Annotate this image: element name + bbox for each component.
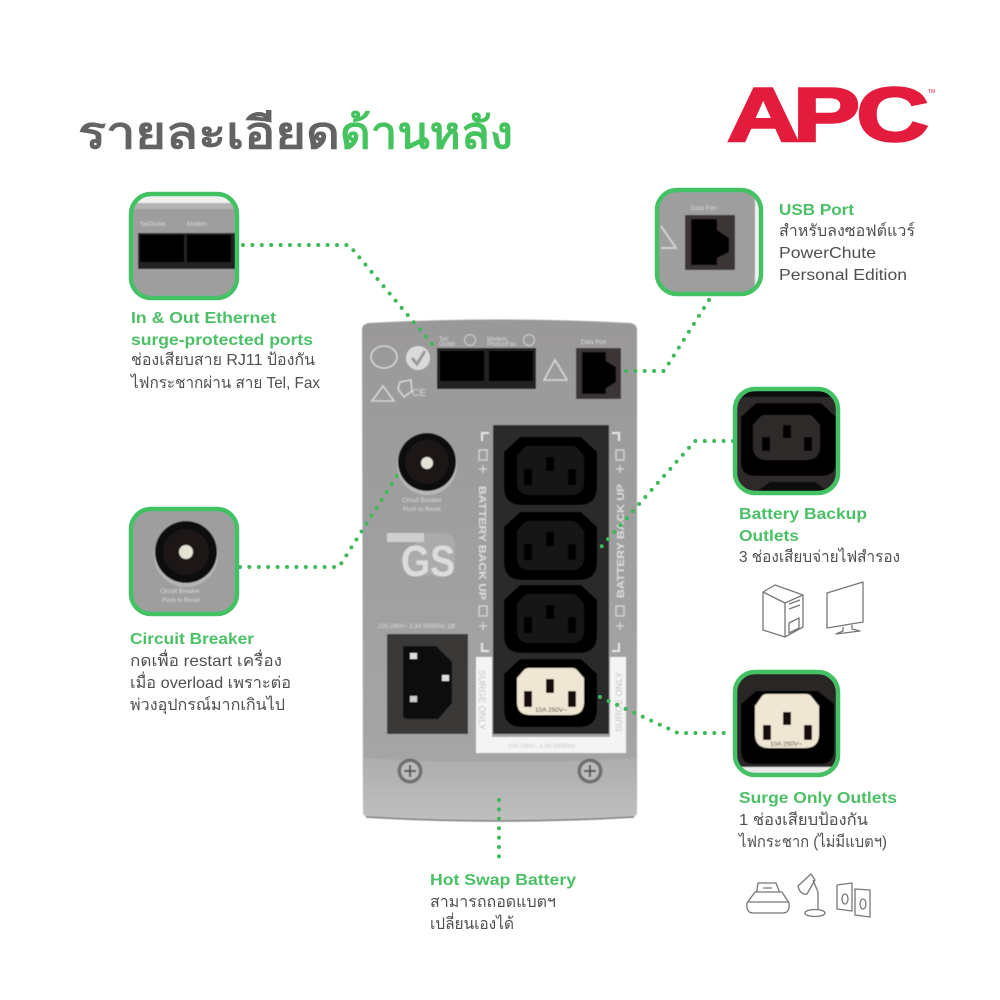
thumbnail: usb port: [657, 190, 761, 294]
icon: printer: [747, 883, 789, 913]
APC logo: TM: [928, 89, 935, 95]
text: usb port: [779, 202, 915, 284]
thumbnail: usb port: Data Port: [691, 206, 717, 212]
data port: Data Port: [581, 340, 607, 346]
icon: speakers: [837, 883, 870, 917]
text: battery outlets: 3 ช่องเสียบจ่ายไฟสำรอง: [739, 547, 900, 566]
battery back up labels: BATTERY BACK UP: [476, 486, 488, 600]
connector: battery outlets: [601, 441, 733, 547]
data port: [576, 340, 621, 399]
text: surge outlets: Surge Only Outlets: [739, 790, 897, 807]
thumbnail: circuit breaker: [131, 509, 237, 614]
text: circuit breaker: พ่วงอุปกรณ์มากเกินไป: [130, 695, 285, 715]
surge label strip: SURGE ONLY: [476, 670, 487, 731]
text: hot swap battery: สามารถถอดแบตฯ: [430, 894, 556, 911]
text: hot swap battery: เปลี่ยนเองได้: [430, 912, 514, 933]
text: hot swap battery: Hot Swap Battery: [430, 872, 576, 889]
certification marks: [371, 346, 567, 401]
text: surge outlets: [737, 790, 897, 851]
outlet 3: [504, 585, 597, 653]
icon: desk lamp: [798, 874, 825, 916]
connector: circuit breaker: [240, 474, 398, 567]
thumbnail: surge outlet: [735, 672, 838, 775]
text: usb port: Personal Edition: [779, 267, 907, 284]
thumbnail: circuit breaker: Push to Reset: [162, 598, 200, 604]
battery back up labels: BATTERY BACK UP: [615, 484, 627, 598]
text: usb port: สำหรับลงซอฟต์แวร์: [779, 221, 915, 240]
UPS rear panel: CE: [412, 388, 426, 399]
phone ports: Modem: [487, 337, 507, 343]
text: surge outlets: ไฟกระชาก (ไม่มีแบตฯ): [737, 832, 887, 851]
circuit breaker: Circuit Breaker: [402, 498, 442, 504]
APC logo: APC: [727, 72, 929, 157]
thumbnail: ethernet ports: Tel/Outlet: [140, 222, 166, 228]
thumbnail: surge outlet: 10A 250V~: [770, 741, 802, 748]
text: usb port: PowerChute: [779, 245, 876, 262]
screws: [398, 758, 602, 784]
connector: usb: [620, 300, 709, 371]
text: battery outlets: [739, 506, 900, 566]
text: ethernet: In & Out Ethernet: [131, 310, 277, 327]
text: circuit breaker: กดเพื่อ restart เครื่อง: [130, 649, 282, 670]
title: ด้านหลัง: [340, 109, 513, 158]
connector: surge outlet: [600, 697, 733, 733]
text: ethernet: surge-protected ports: [131, 332, 313, 349]
thumbnail: ethernet ports: Modem: [187, 222, 207, 228]
text: ethernet: ช่องเสียบสาย RJ11 ป้องกัน: [131, 351, 315, 369]
surge label strip: SURGE ONLY: [614, 671, 625, 732]
surge label strip: [476, 657, 626, 753]
icon: computer tower: [763, 585, 803, 637]
phone ports: Phone/Fax: [487, 342, 516, 348]
UPS rear panel: [362, 320, 637, 821]
input label: 220-240V~ 3.3A 50/60Hz 1Ø: [378, 624, 455, 630]
text: battery outlets: Battery Backup: [739, 506, 867, 523]
text: circuit breaker: Circuit Breaker: [130, 631, 254, 648]
thumbnail: ethernet ports: [131, 194, 237, 298]
text: surge outlets: 1 ช่องเสียบป้องกัน: [739, 811, 868, 829]
power inlet: [387, 634, 468, 734]
text: battery outlets: Outlets: [739, 528, 799, 545]
text: circuit breaker: [130, 631, 291, 715]
GS mark: GS: [401, 537, 455, 586]
phone ports: Outlet: [439, 342, 455, 348]
thumbnail: battery outlet: [735, 389, 838, 493]
text: circuit breaker: เมื่อ overload เพราะต่อ: [130, 671, 291, 692]
connector: ethernet: [243, 245, 437, 350]
thumbnail: circuit breaker: Circuit Breaker: [160, 589, 200, 595]
outlet 1: [504, 437, 597, 505]
surge label strip: 220-240V~ 2.3A 50/60Hz: [508, 744, 575, 750]
battery back up labels: [476, 433, 627, 651]
connector: hot swap battery: [497, 800, 501, 862]
outlet 4: surge: [504, 659, 597, 727]
text: ethernet: ไฟกระชากผ่าน สาย Tel, Fax: [129, 373, 320, 392]
GS mark: [387, 533, 455, 586]
circuit breaker: [397, 433, 457, 513]
outlet 4: surge: 10A 250V~: [535, 707, 567, 714]
phone ports: Tel/: [439, 337, 449, 343]
text: usb port: USB Port: [779, 202, 855, 219]
title: [78, 109, 513, 158]
title: รายละเอียด: [78, 109, 340, 158]
text: ethernet: [129, 310, 320, 392]
phone ports: [437, 334, 536, 389]
text: hot swap battery: [430, 872, 576, 933]
icon: monitor: [827, 582, 863, 634]
outlet 2: [504, 512, 597, 580]
battery lid: [363, 758, 637, 820]
circuit breaker: Push to Reset: [403, 507, 441, 513]
outlet panel: [493, 425, 609, 734]
